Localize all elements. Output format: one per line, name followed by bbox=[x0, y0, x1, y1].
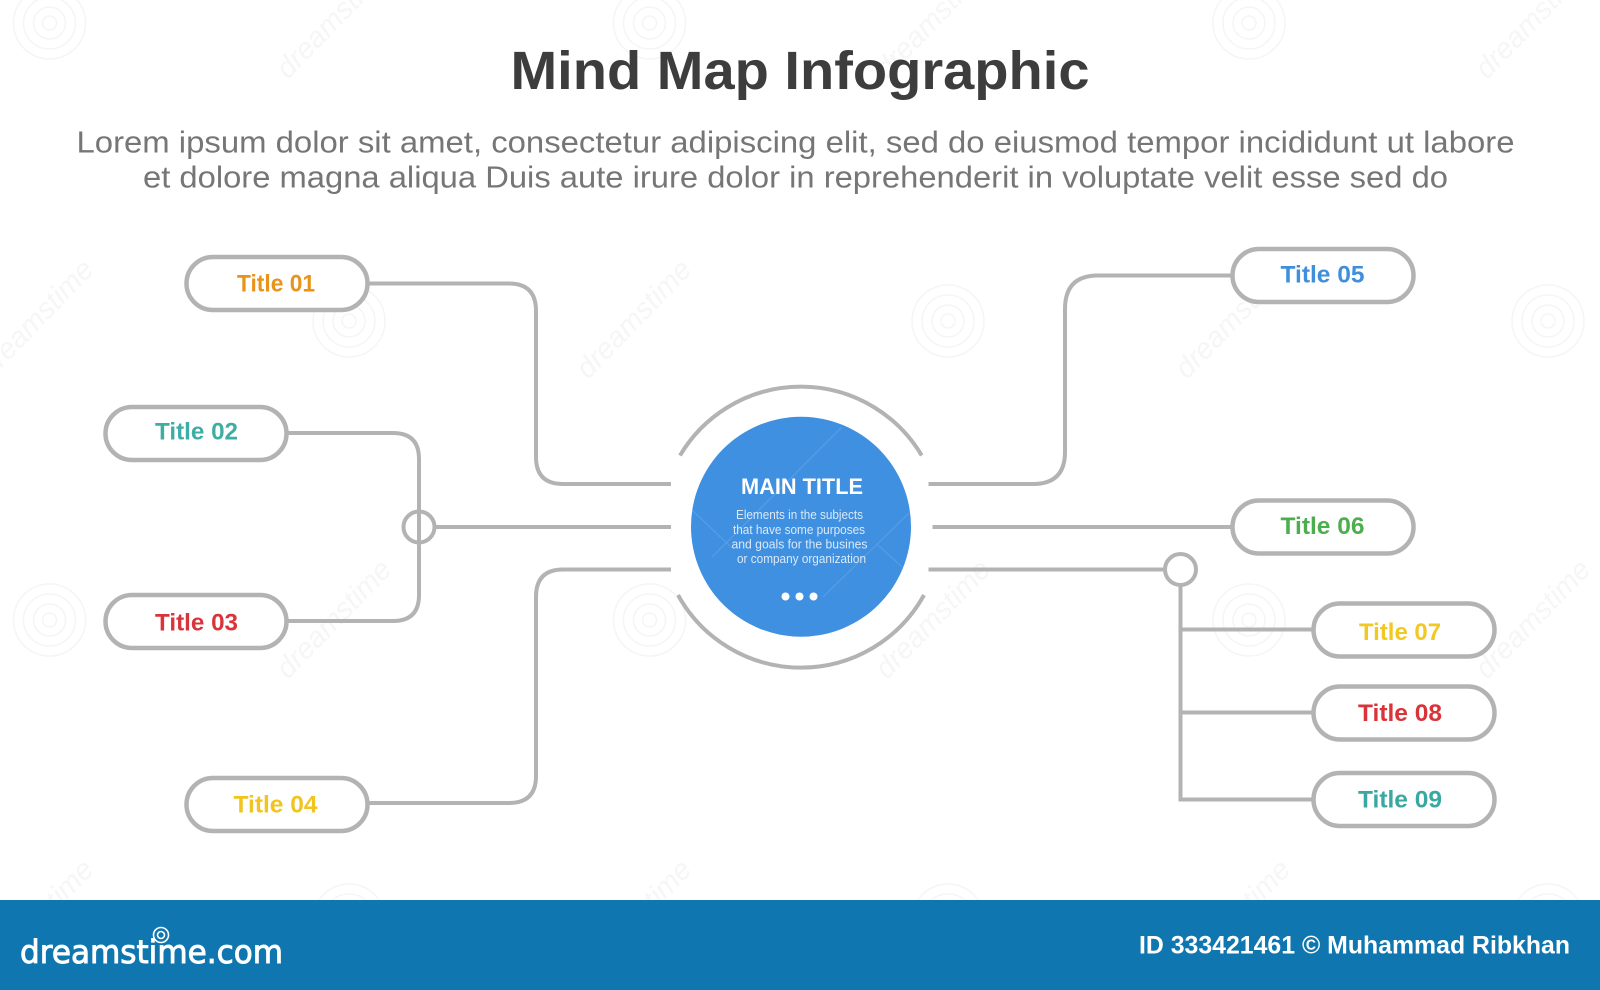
title: Mind Map Infographic bbox=[510, 41, 1090, 101]
footer banner bbox=[0, 900, 1600, 990]
banner background bbox=[0, 900, 1600, 990]
pill: Title 03 bbox=[106, 595, 286, 648]
pill: Title 04: Title 04 bbox=[234, 792, 318, 818]
pill: Title 07: Title 07 bbox=[1359, 619, 1441, 646]
pill: Title 03: Title 03 bbox=[155, 610, 238, 636]
junction node left bbox=[404, 512, 434, 542]
watermark pattern: dreamstime bbox=[570, 854, 698, 985]
hub main title: MAIN TITLE bbox=[741, 474, 863, 499]
connector: Title 04 to center bbox=[369, 570, 671, 803]
watermark pattern: dreamstime bbox=[1169, 254, 1297, 385]
hub watermark lines bbox=[693, 427, 909, 597]
pill: Title 05 bbox=[1232, 249, 1414, 302]
logo spiral icon bbox=[154, 928, 168, 942]
pill: Title 01 bbox=[186, 257, 368, 310]
connector: Titles 07 to 09 to center bbox=[928, 570, 1312, 800]
watermark pattern: dreamstime bbox=[1169, 854, 1297, 985]
hub description: Elements in the subjects bbox=[736, 507, 863, 522]
center hub bbox=[678, 387, 924, 668]
connector: Title 01 to center bbox=[369, 284, 671, 484]
pill: Title 02: Title 02 bbox=[155, 418, 238, 446]
pill: Title 08 bbox=[1314, 686, 1494, 740]
hub outer arc top bbox=[680, 387, 922, 456]
pill: Title 08: Title 08 bbox=[1358, 700, 1442, 727]
junction node right bbox=[1165, 554, 1196, 585]
pill: Title 05: Title 05 bbox=[1280, 262, 1364, 288]
pill: Title 02 bbox=[106, 407, 286, 460]
watermark pattern: dreamstime bbox=[270, 554, 398, 685]
hub description: or company organization bbox=[737, 551, 866, 566]
subtitle text block: Lorem ipsum dolor sit amet, consectetur adipiscing elit, sed do eiusmod tempor incididunt ut labore bbox=[76, 124, 1514, 160]
watermark pattern: dreamstime bbox=[570, 254, 698, 385]
subtitle text block: et dolore magna aliqua Duis aute irure dolor in reprehenderit in voluptate velit esse sed do bbox=[143, 160, 1448, 194]
pill: Title 06: Title 06 bbox=[1280, 513, 1364, 540]
connector: Titles 02 and 03 to center bbox=[288, 433, 671, 621]
pill: Title 06 bbox=[1232, 500, 1414, 554]
watermark pattern: dreamstime bbox=[869, 554, 997, 685]
image id and author credit: ID 333421461 © Muhammad Ribkhan bbox=[1139, 932, 1570, 960]
watermark pattern: dreamstime bbox=[1469, 554, 1597, 685]
connector: Title 05 to center bbox=[928, 276, 1231, 484]
hub description bbox=[732, 507, 868, 566]
pill: Title 09 bbox=[1314, 773, 1494, 826]
hub description: that have some purposes bbox=[733, 522, 865, 537]
pill: Title 01: Title 01 bbox=[237, 270, 315, 298]
logo wordmark: dreamstime.com bbox=[20, 933, 283, 971]
pill: Title 07 bbox=[1314, 604, 1494, 656]
hub outer arc bottom bbox=[678, 595, 924, 668]
hub dots bbox=[782, 592, 818, 600]
hub blue circle bbox=[691, 417, 911, 637]
pill: Title 04 bbox=[186, 778, 368, 831]
pill: Title 09: Title 09 bbox=[1358, 786, 1442, 814]
hub description: and goals for the busines bbox=[732, 536, 868, 552]
subtitle text block bbox=[76, 124, 1514, 194]
connector: Title 06 to center bbox=[932, 525, 1231, 529]
